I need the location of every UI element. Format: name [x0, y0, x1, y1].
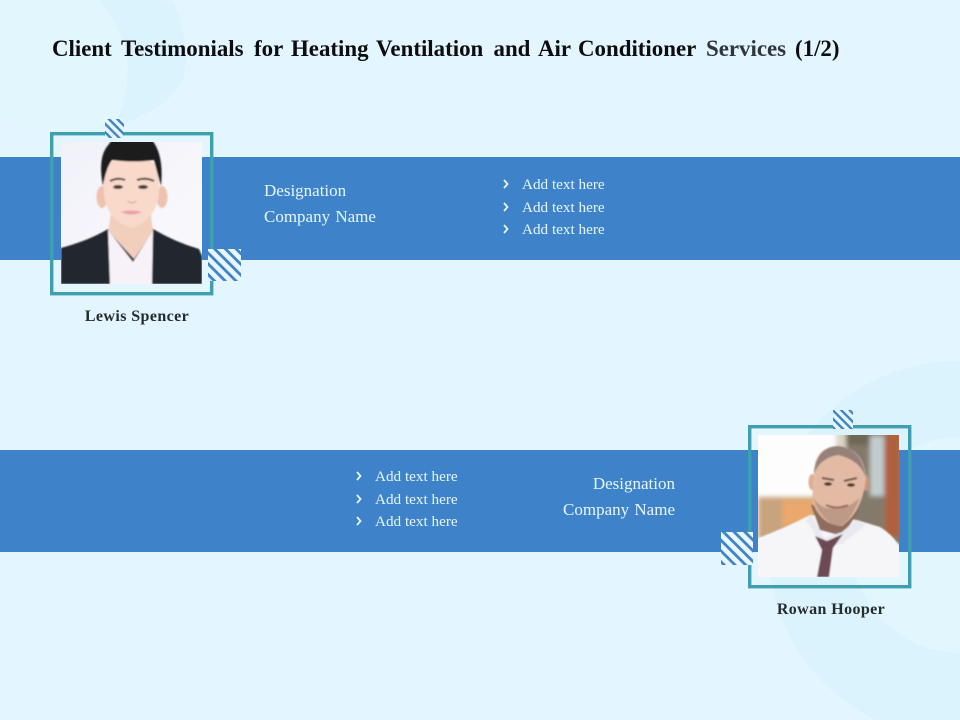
neck — [108, 208, 153, 259]
decorative circle: bottom right — [769, 361, 960, 720]
blurred background — [844, 435, 899, 546]
frame: Rowan Hooper — [750, 427, 910, 587]
shirt — [108, 230, 153, 284]
decorative circle: top left — [0, 0, 186, 133]
designation block: bottom: Designation — [593, 474, 675, 493]
pattern square: top small — [833, 410, 853, 429]
title: Client — [52, 36, 112, 61]
designation block: top: Company Name — [264, 207, 376, 226]
pattern square: top small — [105, 119, 124, 138]
band: bottom — [0, 450, 960, 552]
designation block: top: Designation — [264, 181, 347, 200]
title: for — [254, 36, 283, 61]
title: (1/2) — [795, 36, 840, 61]
bullet list: bottom — [357, 468, 458, 530]
title: Air — [538, 36, 571, 61]
designation block: bottom — [563, 474, 675, 519]
photo: Rowan Hooper — [758, 430, 903, 577]
jacket — [61, 229, 202, 284]
hair — [814, 446, 866, 478]
brows — [110, 179, 154, 181]
bullet list: top: Add text here — [522, 199, 605, 216]
eyes — [824, 482, 832, 486]
neck — [811, 505, 860, 536]
shirt — [758, 515, 900, 577]
stubble — [813, 497, 860, 526]
name: Lewis Spencer: Lewis Spencer — [85, 308, 189, 325]
bullet list: top — [504, 176, 605, 238]
bullet list: bottom: Add text here — [375, 491, 458, 508]
bullet list: bottom: Add text here — [375, 513, 458, 530]
pattern square: right large — [208, 249, 241, 281]
nose — [128, 201, 136, 203]
pattern square: left large — [721, 532, 753, 565]
bullet list: top: Add text here — [522, 221, 605, 238]
ears — [808, 474, 816, 490]
mouth — [121, 210, 142, 214]
ears — [96, 186, 108, 208]
bullet list: bottom: Add text here — [375, 468, 458, 485]
name: Rowan Hooper: Rowan Hooper — [777, 601, 885, 618]
title: Services — [706, 36, 786, 61]
designation block: bottom: Company Name — [563, 500, 675, 519]
title: Heating — [291, 36, 369, 61]
tie — [815, 534, 843, 577]
band: top — [0, 157, 960, 260]
brows — [822, 478, 857, 481]
bullet list: top: Add text here — [522, 176, 605, 193]
hair — [101, 140, 162, 186]
collar — [806, 514, 866, 546]
frame: Lewis Spencer — [52, 134, 212, 294]
head — [812, 446, 866, 526]
title: Testimonials — [121, 36, 244, 61]
eyes — [113, 185, 123, 189]
face — [104, 158, 159, 228]
title: Ventilation — [376, 36, 484, 61]
title: Conditioner — [578, 36, 696, 61]
title: and — [494, 36, 531, 61]
photo: Lewis Spencer — [61, 140, 202, 284]
mouth — [826, 505, 848, 508]
designation block: top — [264, 181, 376, 226]
